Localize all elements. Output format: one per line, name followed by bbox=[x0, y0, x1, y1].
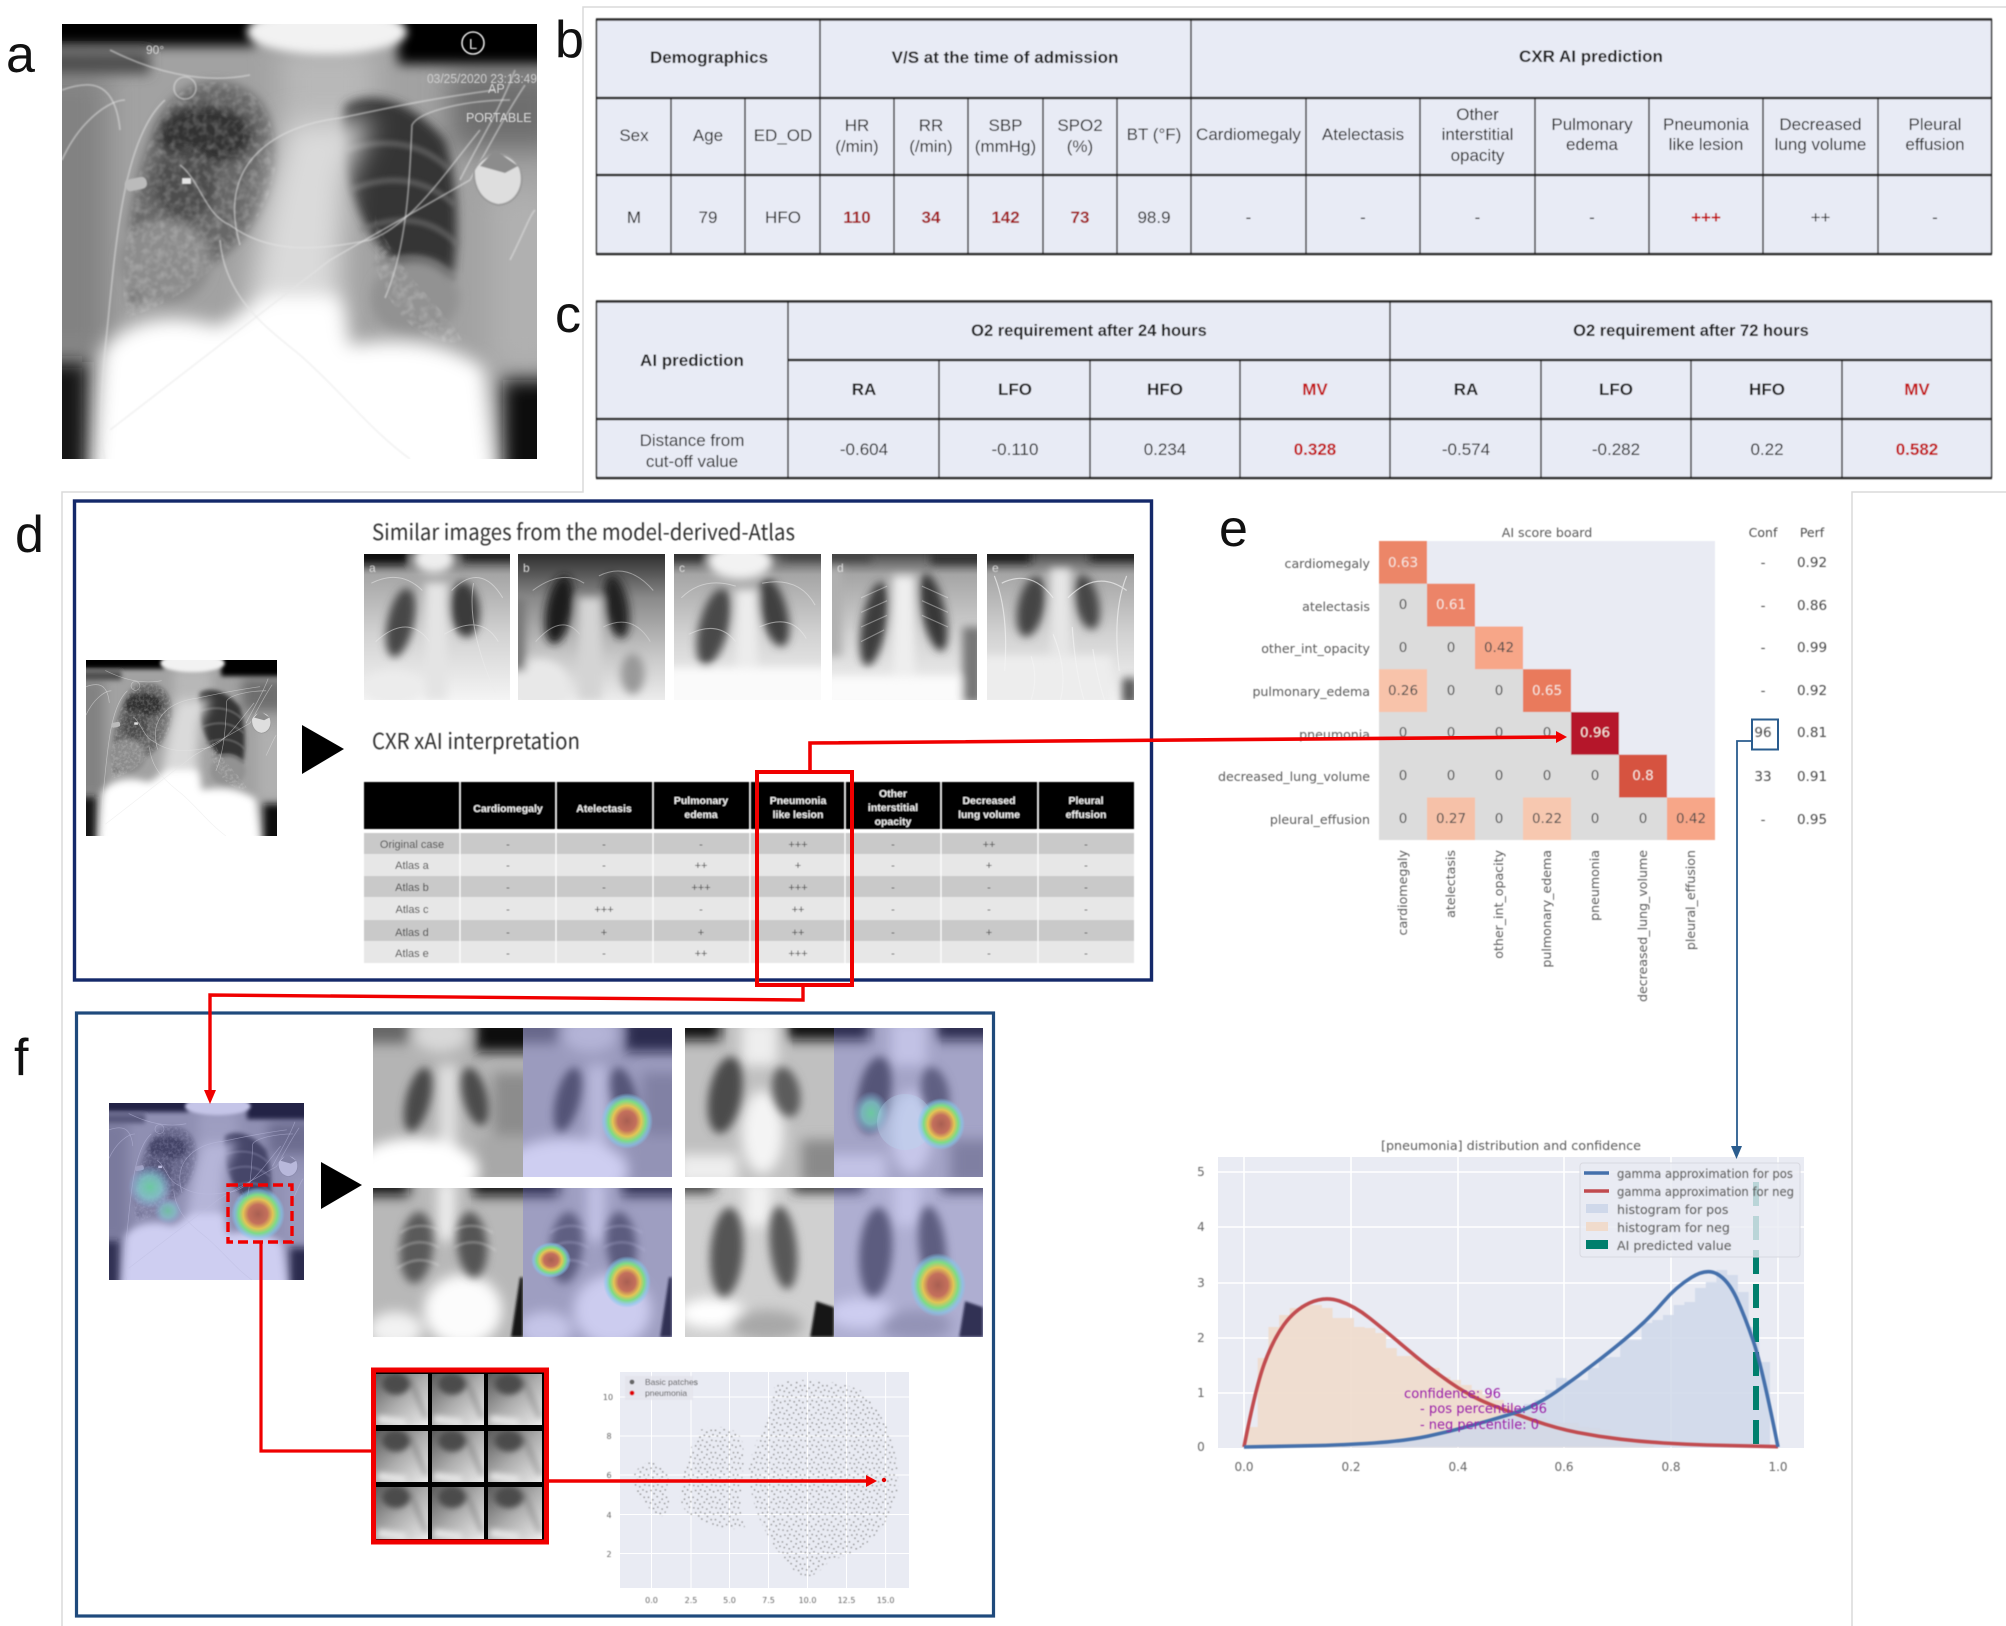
heatmap values: 0 bbox=[1495, 768, 1503, 784]
heatmap row labels bbox=[1218, 556, 1371, 827]
heatmap column labels bbox=[1395, 849, 1698, 1002]
table c headers: MV bbox=[1302, 380, 1328, 399]
xAI table rows: ++ bbox=[792, 904, 804, 916]
chart axis ticks: 0 bbox=[1197, 1440, 1205, 1454]
chart axis ticks: 0.4 bbox=[1448, 1460, 1468, 1474]
xAI table header row: Pleural bbox=[1068, 795, 1104, 807]
xAI table rows: - bbox=[1084, 882, 1088, 894]
table c values: 0.582 bbox=[1896, 440, 1938, 459]
xAI table header row: interstitial bbox=[868, 802, 918, 814]
heatmap values: 0.63 bbox=[1388, 555, 1418, 571]
panel d: similar images and xAI interpretation bbox=[69, 501, 1152, 980]
xAI table rows: - bbox=[699, 904, 703, 916]
chart: pneumonia distribution and confidence bbox=[1197, 1138, 1804, 1474]
values: HFO bbox=[765, 208, 801, 227]
chart axis ticks: 0.0 bbox=[1234, 1460, 1254, 1474]
heatmap column labels: pneumonia bbox=[1587, 850, 1602, 921]
xAI table rows: ++ bbox=[695, 860, 707, 872]
purple confidence annotation: - neg percentile: 0 bbox=[1420, 1418, 1539, 1433]
scatter ticks: 10.0 bbox=[799, 1596, 816, 1605]
panel f: heatmap overlays and patch embedding bbox=[76, 1013, 998, 1616]
column headers: Age bbox=[693, 126, 723, 145]
values: 79 bbox=[699, 208, 717, 227]
heatmap values: 0 bbox=[1447, 683, 1455, 699]
chart axis ticks: 0.8 bbox=[1661, 1460, 1681, 1474]
xAI table rows: ++ bbox=[792, 927, 804, 939]
table c headers: HFO bbox=[1147, 380, 1183, 399]
heatmap values: 0 bbox=[1399, 768, 1407, 784]
red selection box on pneumonia column bbox=[757, 772, 852, 985]
X-ray annotations: 03/25/2020 23:13:49 bbox=[427, 72, 537, 86]
arrow: triangle bbox=[321, 1162, 362, 1209]
table c values: 0.22 bbox=[1750, 440, 1784, 459]
Conf and Perf columns: 0.91 bbox=[1797, 769, 1827, 785]
purple confidence annotation: confidence: 96 bbox=[1404, 1387, 1501, 1402]
column headers: Decreased bbox=[1779, 115, 1862, 134]
xAI table rows: - bbox=[1084, 948, 1088, 960]
image pair: top right bbox=[673, 1016, 998, 1184]
table c headers: O2 requirement after 72 hours bbox=[1573, 322, 1809, 340]
xAI table rows: - bbox=[699, 839, 703, 851]
Conf and Perf columns: 0.92 bbox=[1797, 555, 1827, 571]
purple confidence annotation bbox=[1404, 1387, 1547, 1433]
arrow: confidence to distribution chart bbox=[1731, 741, 1752, 1159]
column headers: (mmHg) bbox=[975, 137, 1036, 156]
xAI table rows: - bbox=[602, 839, 606, 851]
heatmap row labels: atelectasis bbox=[1302, 599, 1370, 614]
table c headers bbox=[640, 322, 1930, 399]
table c values: -0.574 bbox=[1442, 440, 1490, 459]
heatmap column labels: pulmonary_edema bbox=[1539, 850, 1554, 968]
legend: AI predicted value bbox=[1617, 1238, 1732, 1253]
heatmap values: 0 bbox=[1399, 725, 1407, 741]
xAI table rows: - bbox=[1084, 860, 1088, 872]
column headers: opacity bbox=[1451, 146, 1505, 165]
heatmap cells bbox=[1379, 541, 1715, 840]
scatter ticks: 6 bbox=[606, 1471, 612, 1480]
legend: histogram for neg bbox=[1617, 1220, 1730, 1235]
heatmap row labels: cardiomegaly bbox=[1285, 556, 1371, 571]
xAI table rows: - bbox=[1084, 904, 1088, 916]
xAI table rows: Atlas c bbox=[395, 904, 429, 916]
heading: xAI interpretation: CXR xAI interpretation bbox=[372, 724, 580, 756]
panel c: oxygen requirement prediction table bbox=[596, 301, 1992, 478]
connector: dashed box to patches bbox=[261, 1242, 371, 1451]
scatter legend: pneumonia bbox=[645, 1388, 687, 1398]
column headers: SBP bbox=[988, 116, 1023, 135]
X-ray annotations: L bbox=[469, 36, 477, 53]
gamma curve neg bbox=[1244, 1299, 1778, 1447]
panel label d: d bbox=[15, 506, 44, 564]
xAI table rows: - bbox=[1084, 839, 1088, 851]
Conf and Perf columns: - bbox=[1761, 598, 1766, 614]
heatmap column labels: cardiomegaly bbox=[1395, 849, 1410, 935]
column headers: edema bbox=[1566, 135, 1619, 154]
table c values: cut-off value bbox=[646, 452, 738, 471]
X-ray annotations: 90° bbox=[146, 43, 164, 57]
xAI table rows: - bbox=[506, 948, 510, 960]
atlas images bbox=[357, 544, 1146, 712]
xAI table rows: + bbox=[698, 927, 704, 939]
chart axis ticks: 3 bbox=[1197, 1276, 1205, 1290]
table c values: -0.604 bbox=[840, 440, 888, 459]
arrow: patches to scatter point bbox=[548, 1475, 877, 1487]
values: - bbox=[1589, 208, 1595, 227]
heatmap column labels: decreased_lung_volume bbox=[1635, 850, 1650, 1002]
heatmap values: 0.42 bbox=[1484, 640, 1514, 656]
xAI table header row: Pulmonary bbox=[674, 795, 728, 807]
arrow: triangle bbox=[302, 725, 344, 774]
histogram for pos bbox=[1342, 1270, 1770, 1447]
Conf and Perf columns bbox=[1749, 525, 1827, 828]
legend: gamma approximation for pos bbox=[1617, 1166, 1793, 1181]
scatter ticks: 7.5 bbox=[762, 1596, 775, 1605]
chart axis ticks: 1.0 bbox=[1768, 1460, 1788, 1474]
scatter ticks: 2.5 bbox=[685, 1596, 697, 1605]
image pair: top left bbox=[352, 1016, 687, 1204]
values: - bbox=[1360, 208, 1366, 227]
group headers: CXR AI prediction bbox=[1519, 47, 1663, 66]
column headers: like lesion bbox=[1669, 135, 1743, 154]
xAI table rows: - bbox=[506, 927, 510, 939]
table c headers: LFO bbox=[1599, 380, 1633, 399]
atlas images: e bbox=[992, 561, 999, 575]
xAI table rows: + bbox=[986, 927, 992, 939]
Conf and Perf columns: - bbox=[1761, 812, 1766, 828]
xAI table rows: - bbox=[891, 948, 895, 960]
values: 142 bbox=[991, 208, 1020, 227]
xAI table header row: Cardiomegaly bbox=[473, 803, 543, 815]
xAI table rows: Original case bbox=[380, 839, 444, 851]
AI predicted value line bbox=[1753, 1182, 1759, 1447]
heatmap values: 0 bbox=[1447, 640, 1455, 656]
heatmap row labels: pneumonia bbox=[1299, 727, 1370, 742]
scatter clusters bbox=[633, 1380, 898, 1576]
table c headers: O2 requirement after 24 hours bbox=[971, 322, 1207, 340]
column headers: lung volume bbox=[1775, 135, 1866, 154]
values: 98.9 bbox=[1137, 208, 1171, 227]
panel label f: f bbox=[14, 1029, 29, 1087]
X-ray annotations: AP bbox=[488, 82, 505, 96]
xAI table header row: like lesion bbox=[773, 809, 823, 821]
xAI table rows: - bbox=[506, 882, 510, 894]
scatter ticks: 8 bbox=[606, 1432, 612, 1441]
xAI table rows: ++ bbox=[983, 839, 995, 851]
column headers: Sex bbox=[619, 126, 649, 145]
table c values: -0.110 bbox=[992, 440, 1038, 459]
scatter ticks: 10 bbox=[603, 1393, 613, 1402]
heatmap values: 0.65 bbox=[1532, 683, 1562, 699]
heatmap row labels: pleural_effusion bbox=[1270, 812, 1370, 827]
xAI table rows: Atlas a bbox=[395, 860, 430, 872]
xAI table rows: - bbox=[1084, 927, 1088, 939]
values: ++ bbox=[1811, 208, 1830, 227]
table c headers: AI prediction bbox=[640, 351, 744, 370]
panel b: patient summary table bbox=[596, 19, 1992, 254]
scatter ticks bbox=[603, 1393, 895, 1605]
xAI table rows: - bbox=[891, 904, 895, 916]
Conf and Perf columns: - bbox=[1761, 683, 1766, 699]
xAI table rows: + bbox=[795, 860, 801, 872]
values: 34 bbox=[922, 208, 941, 227]
xAI table rows: Atlas b bbox=[395, 882, 429, 894]
chart axis ticks: 5 bbox=[1197, 1165, 1205, 1179]
scatter legend bbox=[625, 1376, 698, 1400]
xAI table rows: +++ bbox=[788, 882, 808, 894]
X-ray annotations bbox=[146, 32, 537, 125]
Conf and Perf columns: 0.99 bbox=[1797, 640, 1827, 656]
table c headers: RA bbox=[1454, 380, 1478, 399]
xAI table rows: + bbox=[601, 927, 607, 939]
xAI table rows: - bbox=[602, 948, 606, 960]
chart axis ticks bbox=[1197, 1165, 1788, 1474]
column headers: ED_OD bbox=[754, 126, 812, 145]
table c headers: RA bbox=[852, 380, 876, 399]
atlas images: c bbox=[679, 561, 685, 575]
column headers bbox=[619, 105, 1965, 165]
xAI table header row: opacity bbox=[875, 816, 912, 828]
xAI table rows: - bbox=[506, 839, 510, 851]
heatmap values: 0.96 bbox=[1580, 725, 1610, 741]
panel e: AI score board heatmap: AI score board bbox=[1502, 525, 1592, 540]
xAI table rows: - bbox=[506, 860, 510, 872]
heatmap values: 0 bbox=[1495, 811, 1503, 827]
table c values: 0.328 bbox=[1294, 440, 1336, 459]
xAI table rows bbox=[380, 839, 1088, 960]
heatmap values: 0 bbox=[1591, 811, 1599, 827]
heatmap values: 0 bbox=[1543, 725, 1551, 741]
xAI table rows: - bbox=[987, 948, 991, 960]
xAI table rows: +++ bbox=[594, 904, 614, 916]
table c headers: LFO bbox=[998, 380, 1032, 399]
xAI table rows: - bbox=[602, 882, 606, 894]
xAI interpretation table bbox=[364, 782, 1134, 963]
values: M bbox=[627, 208, 641, 227]
column headers: effusion bbox=[1905, 135, 1965, 154]
xAI table header row: edema bbox=[684, 809, 718, 821]
xAI table rows: - bbox=[987, 904, 991, 916]
panel label a: a bbox=[6, 26, 35, 84]
column headers: Pleural bbox=[1909, 115, 1961, 134]
xAI table rows: - bbox=[602, 860, 606, 872]
heatmap values: 0 bbox=[1399, 811, 1407, 827]
column headers: SPO2 bbox=[1057, 116, 1103, 135]
group headers bbox=[650, 47, 1663, 67]
table c values: Distance from bbox=[640, 431, 744, 450]
chart axis ticks: 0.6 bbox=[1554, 1460, 1574, 1474]
column headers: (/min) bbox=[909, 137, 953, 156]
atlas images: b bbox=[523, 561, 530, 575]
panel label b: b bbox=[555, 11, 584, 69]
heatmap values: 0 bbox=[1543, 768, 1551, 784]
heatmap row labels: other_int_opacity bbox=[1261, 641, 1371, 656]
arrow: table to score board bbox=[810, 731, 1567, 772]
xAI table header row: Pneumonia bbox=[770, 795, 826, 807]
X-ray annotations: PORTABLE bbox=[466, 111, 532, 125]
image pair: bottom left bbox=[361, 1176, 684, 1347]
confidence highlight box bbox=[1752, 720, 1778, 750]
heatmap values: 0 bbox=[1495, 683, 1503, 699]
xAI table rows: +++ bbox=[788, 948, 808, 960]
values: - bbox=[1932, 208, 1938, 227]
patch grid bbox=[374, 1370, 546, 1542]
xAI table rows: ++ bbox=[695, 948, 707, 960]
legend bbox=[1580, 1163, 1800, 1257]
heatmap values bbox=[1388, 555, 1706, 827]
panel a: chest X-ray bbox=[20, 0, 568, 492]
heatmap values: 0 bbox=[1447, 768, 1455, 784]
arrow: table to overlay image bbox=[204, 985, 803, 1104]
xAI table header row bbox=[473, 788, 1106, 828]
heatmap values: 0.26 bbox=[1388, 683, 1418, 699]
heatmap column labels: atelectasis bbox=[1443, 850, 1458, 918]
scatter ticks: 12.5 bbox=[838, 1596, 855, 1605]
atlas images: d bbox=[837, 561, 844, 575]
heatmap row labels: pulmonary_edema bbox=[1252, 684, 1370, 699]
group headers: Demographics bbox=[650, 48, 768, 67]
xAI table rows: - bbox=[891, 927, 895, 939]
table c values bbox=[640, 431, 1938, 471]
heatmap values: 0.61 bbox=[1436, 597, 1466, 613]
xAI table rows: + bbox=[986, 860, 992, 872]
table c headers: MV bbox=[1904, 380, 1930, 399]
column headers: (/min) bbox=[835, 137, 879, 156]
histogram for neg bbox=[1247, 1305, 1654, 1447]
table c headers: HFO bbox=[1749, 380, 1785, 399]
heatmap values: 0.8 bbox=[1632, 768, 1654, 784]
values: - bbox=[1246, 208, 1251, 227]
xAI table rows: +++ bbox=[788, 839, 808, 851]
values: 110 bbox=[843, 208, 871, 227]
xAI table header row: Decreased bbox=[962, 795, 1016, 807]
Conf and Perf columns: 0.95 bbox=[1797, 812, 1827, 828]
xAI table rows: - bbox=[891, 839, 895, 851]
Conf and Perf columns: Conf bbox=[1749, 525, 1778, 540]
column headers: Cardiomegaly bbox=[1196, 125, 1301, 144]
xAI table rows: - bbox=[891, 860, 895, 872]
panel label c: c bbox=[555, 286, 581, 344]
heatmap row labels: decreased_lung_volume bbox=[1218, 769, 1370, 784]
chart axis ticks: 4 bbox=[1197, 1220, 1205, 1234]
xAI table rows: Atlas e bbox=[395, 948, 429, 960]
image pair: bottom right bbox=[673, 1176, 995, 1340]
column headers: HR bbox=[845, 116, 869, 135]
panel label e: e bbox=[1219, 500, 1248, 558]
xAI table header row: Atelectasis bbox=[576, 803, 632, 815]
column headers: Other bbox=[1456, 105, 1499, 124]
column headers: Pulmonary bbox=[1551, 115, 1633, 134]
Conf and Perf columns: 0.86 bbox=[1797, 598, 1827, 614]
scatter legend: Basic patches bbox=[645, 1377, 698, 1387]
column headers: Atelectasis bbox=[1322, 125, 1404, 144]
scatter ticks: 2 bbox=[606, 1550, 612, 1559]
column headers: BT (°F) bbox=[1127, 125, 1181, 144]
table c values: -0.282 bbox=[1592, 440, 1640, 459]
heatmap values: 0.27 bbox=[1436, 811, 1466, 827]
xAI table rows: +++ bbox=[691, 882, 711, 894]
xAI table rows: Atlas d bbox=[395, 927, 429, 939]
heatmap values: 0 bbox=[1399, 597, 1407, 613]
xAI table rows: - bbox=[987, 882, 991, 894]
xAI table rows: - bbox=[891, 882, 895, 894]
scatter plot bbox=[603, 1372, 909, 1605]
original case X-ray bbox=[69, 646, 289, 849]
atlas images: a bbox=[369, 561, 376, 575]
heatmap values: 0 bbox=[1495, 725, 1503, 741]
scatter ticks: 15.0 bbox=[877, 1596, 895, 1605]
xAI table header row: effusion bbox=[1066, 809, 1106, 821]
heatmap values: 0.22 bbox=[1532, 811, 1562, 827]
group headers: V/S at the time of admission bbox=[892, 48, 1118, 67]
panel e: AI score board heatmap bbox=[1218, 525, 1827, 1002]
chart axis ticks: 1 bbox=[1197, 1386, 1205, 1400]
heatmap values: 0 bbox=[1399, 640, 1407, 656]
purple confidence annotation: - pos percentile: 96 bbox=[1420, 1402, 1547, 1417]
scatter ticks: 5.0 bbox=[723, 1596, 736, 1605]
xAI table rows: - bbox=[506, 904, 510, 916]
values: +++ bbox=[1691, 208, 1721, 227]
scatter ticks: 0.0 bbox=[645, 1596, 658, 1605]
Conf and Perf columns: - bbox=[1761, 640, 1766, 656]
values: - bbox=[1475, 208, 1480, 227]
scatter ticks: 4 bbox=[606, 1511, 612, 1520]
chart axis ticks: 2 bbox=[1197, 1331, 1205, 1345]
gamma curve pos bbox=[1244, 1272, 1778, 1447]
Conf and Perf columns: 0.81 bbox=[1797, 725, 1827, 741]
values bbox=[627, 208, 1938, 227]
Conf and Perf columns: 0.92 bbox=[1797, 683, 1827, 699]
legend: gamma approximation for neg bbox=[1617, 1184, 1794, 1199]
heatmap column labels: other_int_opacity bbox=[1491, 849, 1506, 959]
heatmap values: 0 bbox=[1447, 725, 1455, 741]
xAI table header row: Other bbox=[879, 788, 907, 800]
column headers: interstitial bbox=[1442, 125, 1513, 144]
legend: histogram for pos bbox=[1617, 1202, 1728, 1217]
heading: similar images: Similar images from the model-derived-Atlas bbox=[372, 515, 795, 547]
heatmap values: 0.42 bbox=[1676, 811, 1706, 827]
overlay X-ray with heat regions bbox=[92, 1089, 317, 1293]
heatmap values: 0 bbox=[1639, 811, 1647, 827]
table c values: 0.234 bbox=[1144, 440, 1186, 459]
Conf and Perf columns: 96 bbox=[1754, 725, 1772, 741]
Conf and Perf columns: - bbox=[1761, 555, 1766, 571]
chart title: [pneumonia] distribution and confidence bbox=[1381, 1138, 1641, 1153]
column headers: RR bbox=[919, 116, 943, 135]
heatmap values: 0 bbox=[1591, 768, 1599, 784]
Conf and Perf columns: 33 bbox=[1754, 769, 1772, 785]
Conf and Perf columns: Perf bbox=[1800, 525, 1825, 540]
dashed region of interest bbox=[228, 1185, 292, 1242]
column headers: Pneumonia bbox=[1663, 115, 1750, 134]
xAI table header row: lung volume bbox=[958, 809, 1020, 821]
column headers: (%) bbox=[1067, 137, 1093, 156]
heatmap column labels: pleural_effusion bbox=[1683, 850, 1698, 950]
values: 73 bbox=[1071, 208, 1089, 227]
chart axis ticks: 0.2 bbox=[1341, 1460, 1361, 1474]
